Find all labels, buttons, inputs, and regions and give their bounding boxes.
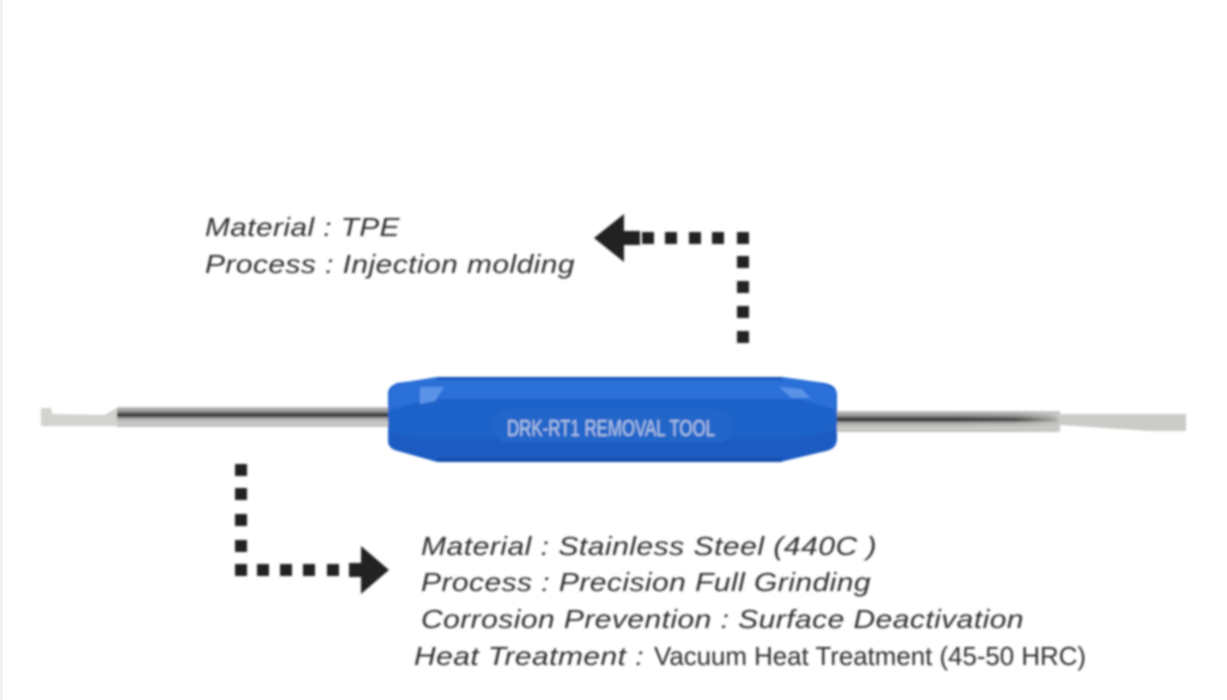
left hook shaft [41,407,390,427]
callout: handle material [205,212,575,279]
callout: shaft material and treatment: Material : Stainless Steel (440C ) [421,531,877,561]
callout: handle material: Material : TPE [205,212,400,242]
callout: shaft material and treatment [414,531,1086,671]
callout: shaft material and treatment: Process : Precision Full Grinding [421,567,871,597]
blue handle [388,377,837,462]
handle label plate [492,409,733,443]
callout: handle material: Process : Injection molding [205,249,575,279]
callout: shaft material and treatment: Vacuum Heat Treatment (45-50 HRC) [654,641,1086,671]
tool: double-ended removal tool [41,377,1186,462]
handle label plate: DRK-RT1 REMOVAL TOOL [507,415,715,441]
right flat blade shaft [835,411,1186,432]
callout: shaft material and treatment: Heat Treatment : [414,641,644,671]
arrow: shaft to steel callout [235,464,389,594]
callout: shaft material and treatment: Corrosion Prevention : Surface Deactivation [421,604,1024,634]
arrow: handle to TPE callout [594,214,749,343]
